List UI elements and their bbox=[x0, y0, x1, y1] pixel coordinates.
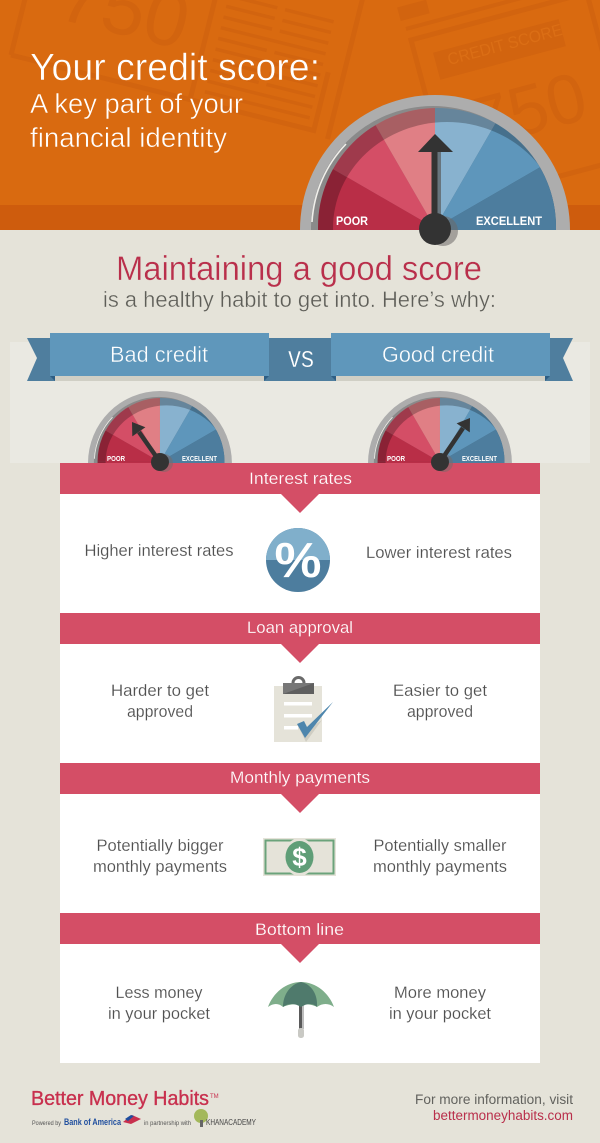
ribbon labels: Good credit bbox=[382, 342, 494, 367]
small gauge labels and needles bbox=[107, 418, 498, 472]
bad credit text: Higher interest rates bbox=[84, 542, 234, 560]
large gauge bbox=[235, 28, 600, 365]
good credit text: Easier to get bbox=[393, 682, 487, 700]
section bar: monthly payments: Monthly payments bbox=[230, 768, 370, 787]
small gauge: bad credit bbox=[53, 355, 267, 535]
background document left bbox=[10, 0, 367, 140]
footer link block: For more information, visit bbox=[415, 1092, 573, 1107]
icon: flag bbox=[123, 1115, 141, 1124]
small gauge labels and needles: POOR bbox=[107, 456, 125, 463]
needle: bad credit bbox=[132, 422, 173, 472]
section bar: interest rates: Interest rates bbox=[249, 469, 352, 488]
small gauge labels and needles: EXCELLENT bbox=[462, 456, 498, 463]
gauge labels: EXCELLENT bbox=[476, 216, 542, 228]
ribbon: bad vs good credit bbox=[27, 333, 573, 381]
good credit text: in your pocket bbox=[389, 1005, 491, 1023]
gauge labels bbox=[336, 216, 542, 228]
small gauge labels and needles: POOR bbox=[387, 456, 405, 463]
section bar: loan approval bbox=[60, 613, 540, 663]
ribbon labels: Bad credit bbox=[110, 342, 208, 367]
heading: Maintaining a good score bbox=[116, 250, 482, 288]
title: Your credit score: bbox=[30, 47, 320, 89]
section bar: monthly payments bbox=[60, 763, 540, 813]
row: monthly payments bbox=[93, 837, 507, 876]
bad credit text bbox=[93, 837, 227, 876]
bad credit text: Less money bbox=[116, 984, 203, 1002]
title bbox=[30, 47, 320, 153]
section bar: loan approval: Loan approval bbox=[247, 618, 353, 637]
ribbon labels bbox=[110, 339, 494, 374]
good credit text bbox=[389, 984, 491, 1023]
bank of america: Bank of America bbox=[64, 1117, 122, 1128]
icon: tree bbox=[194, 1109, 208, 1127]
icon: percent bbox=[266, 528, 330, 592]
gauge labels: POOR bbox=[336, 216, 369, 228]
bad credit text bbox=[108, 984, 210, 1023]
icon: percent: % bbox=[274, 534, 322, 588]
row: interest rates bbox=[84, 528, 512, 592]
background label credit score: CREDIT SCORE bbox=[446, 21, 564, 69]
comparison panel bbox=[10, 342, 590, 463]
khan academy: KHANACADEMY bbox=[206, 1118, 257, 1127]
icon: clipboard with check bbox=[274, 678, 333, 742]
good credit text: monthly payments bbox=[373, 858, 507, 876]
bad credit text: monthly payments bbox=[93, 858, 227, 876]
bad credit text: in your pocket bbox=[108, 1005, 210, 1023]
good credit text: Potentially smaller bbox=[374, 837, 507, 855]
background document right bbox=[397, 0, 600, 206]
header banner bbox=[0, 0, 600, 230]
row: loan approval bbox=[111, 678, 487, 742]
white content panel bbox=[60, 494, 540, 1063]
good credit text bbox=[393, 682, 487, 721]
gauge needle bbox=[418, 134, 458, 246]
good credit text bbox=[373, 837, 507, 876]
icon: dollar bill: $ bbox=[292, 842, 307, 872]
icon: umbrella bbox=[268, 982, 334, 1038]
in partnership: in partnership with bbox=[144, 1120, 191, 1127]
bad credit text: Harder to get bbox=[111, 682, 209, 700]
title: A key part of your bbox=[30, 88, 243, 119]
better money habits wordmark: Better Money Habits bbox=[31, 1088, 209, 1110]
footer logo block bbox=[31, 1088, 257, 1128]
powered by line: Powered by bbox=[32, 1120, 62, 1127]
trademark: TM bbox=[210, 1094, 219, 1100]
good credit text: Lower interest rates bbox=[366, 544, 512, 562]
small gauge: good credit bbox=[333, 355, 547, 535]
footer link block: bettermoneyhabits.com bbox=[433, 1108, 573, 1123]
section bar: bottom line bbox=[60, 913, 540, 963]
title: financial identity bbox=[30, 122, 227, 153]
bad credit text: Potentially bigger bbox=[96, 837, 224, 855]
good credit text: More money bbox=[394, 984, 487, 1002]
dark strip bbox=[0, 205, 600, 230]
ribbon labels: vs bbox=[288, 339, 314, 374]
icon: dollar bill bbox=[263, 838, 336, 876]
row: bottom line bbox=[108, 982, 491, 1038]
section bar: bottom line: Bottom line bbox=[255, 920, 344, 939]
background number 750 right: 750 bbox=[462, 57, 595, 162]
bad credit text: approved bbox=[127, 703, 193, 721]
heading: is a healthy habit to get into. Here’s why: bbox=[103, 287, 496, 312]
good credit text: approved bbox=[407, 703, 473, 721]
small gauge labels and needles: EXCELLENT bbox=[182, 456, 218, 463]
section bar: interest rates bbox=[60, 463, 540, 513]
heading bbox=[103, 250, 496, 312]
footer link block bbox=[415, 1092, 573, 1123]
bad credit text bbox=[111, 682, 209, 721]
needle: good credit bbox=[431, 418, 470, 472]
